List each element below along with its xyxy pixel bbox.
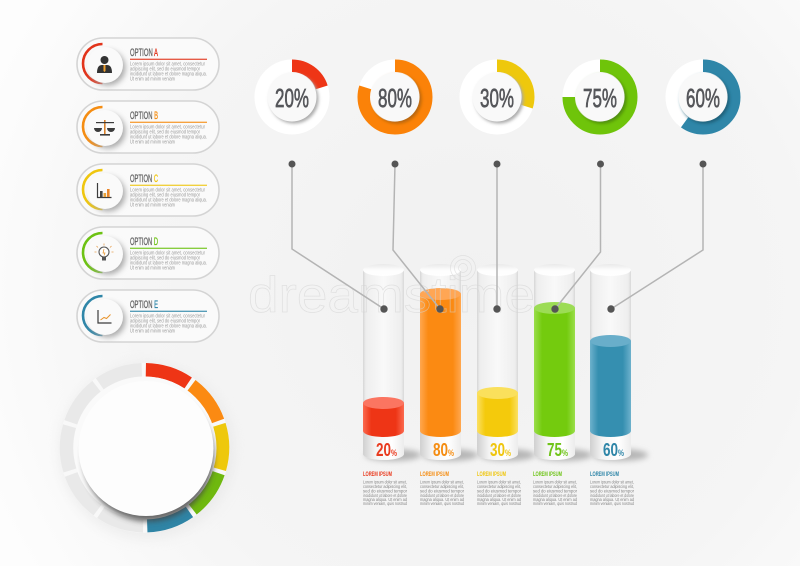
- watermark: dreamstime: [248, 267, 535, 323]
- caption: yellow column: incididunt ut labore et dolore: [477, 493, 521, 498]
- panel: option A: [77, 38, 219, 90]
- donut: 60%: [666, 60, 740, 134]
- caption: yellow column: minim veniam, quis nostrud: [477, 501, 521, 506]
- icon: light bulb: [94, 244, 114, 260]
- option E text: Ut enim ad minim veniam: [130, 328, 175, 334]
- tube: 60% blue: [590, 264, 648, 461]
- donut: 30%: 30%: [480, 83, 514, 113]
- caption: yellow column: magna aliqua. Ut enim ad: [477, 497, 521, 502]
- caption: blue column: minim veniam, quis nostrud: [590, 501, 634, 506]
- caption: red column: sed do eiusmod tempor: [363, 488, 407, 494]
- caption: orange column: magna aliqua. Ut enim ad: [420, 497, 464, 502]
- option E heading: OPTION E: [130, 299, 158, 311]
- donut: 80%: 80%: [378, 83, 412, 113]
- caption: blue column: LOREM IPSUM: [590, 471, 619, 478]
- caption: red column: [363, 471, 407, 506]
- option E text: Lorem ipsum dolor sit amet, consectetur: [130, 314, 205, 320]
- caption: green column: incididunt ut labore et dolore: [533, 493, 577, 498]
- caption: orange column: incididunt ut labore et dolore: [420, 493, 464, 498]
- donut: 30%: [460, 60, 534, 134]
- option A text: incididunt ut labore et dolore magna aliqua.: [130, 72, 207, 78]
- tube: 30% yellow: 30%: [490, 440, 511, 460]
- connector: 20%: [288, 160, 388, 313]
- caption: green column: magna aliqua. Ut enim ad: [533, 497, 577, 502]
- caption: red column: incididunt ut labore et dolore: [363, 493, 407, 498]
- option C text: incididunt ut labore et dolore magna aliqua.: [130, 198, 207, 204]
- tube: 60% blue: 60%: [603, 440, 624, 460]
- caption: orange column: LOREM IPSUM: [420, 471, 449, 478]
- icon: businessman: [97, 56, 112, 73]
- caption: blue column: incididunt ut labore et dolore: [590, 493, 634, 498]
- option C text: adipiscing elit, sed do eiusmod tempor: [130, 192, 200, 198]
- caption: green column: Lorem ipsum dolor sit amet,: [533, 480, 577, 484]
- option C text: Ut enim ad minim veniam: [130, 202, 175, 208]
- donut: 75%: 75%: [583, 83, 617, 113]
- caption: green column: minim veniam, quis nostrud: [533, 501, 577, 506]
- caption: green column: LOREM IPSUM: [533, 471, 562, 478]
- option D text: incididunt ut labore et dolore magna aliqua.: [130, 260, 207, 266]
- option B text: incididunt ut labore et dolore magna aliqua.: [130, 134, 207, 140]
- icon: bar chart: [98, 183, 112, 198]
- caption: blue column: Lorem ipsum dolor sit amet,: [590, 480, 634, 484]
- caption: orange column: Lorem ipsum dolor sit amet,: [420, 480, 464, 484]
- donut: 20%: 20%: [275, 83, 309, 113]
- option D text: [130, 250, 207, 272]
- option D text: adipiscing elit, sed do eiusmod tempor: [130, 256, 200, 262]
- connector: 80%: [392, 160, 444, 313]
- option B text: Lorem ipsum dolor sit amet, consectetur: [130, 124, 205, 130]
- tube: 20% red: 20%: [376, 440, 397, 460]
- big ring chart: [59, 363, 235, 539]
- caption: orange column: [420, 471, 464, 506]
- connector: 75%: [551, 160, 604, 313]
- caption: yellow column: Lorem ipsum dolor sit amet,: [477, 480, 521, 484]
- option A text: Ut enim ad minim veniam: [130, 76, 175, 82]
- option B text: [130, 124, 207, 146]
- panel: option D: [77, 227, 219, 279]
- option C text: [130, 188, 207, 208]
- caption: blue column: consectetur adipiscing elit,: [590, 484, 634, 489]
- caption: blue column: magna aliqua. Ut enim ad: [590, 497, 634, 502]
- option B text: adipiscing elit, sed do eiusmod tempor: [130, 130, 200, 136]
- option E text: adipiscing elit, sed do eiusmod tempor: [130, 318, 200, 324]
- tube: 80% orange: [420, 264, 478, 461]
- connector: 60%: [607, 160, 706, 313]
- panel: option C: [77, 164, 219, 216]
- caption: orange column: minim veniam, quis nostrud: [420, 501, 464, 506]
- icon: line chart: [98, 310, 112, 323]
- caption: green column: sed do eiusmod tempor: [533, 488, 577, 494]
- option A text: [130, 62, 207, 82]
- caption: red column: consectetur adipiscing elit,: [363, 484, 407, 489]
- donut: 20%: [254, 60, 330, 134]
- option A heading: OPTION A: [130, 47, 158, 59]
- caption: red column: magna aliqua. Ut enim ad: [363, 497, 407, 502]
- caption: orange column: sed do eiusmod tempor: [420, 488, 464, 494]
- option E text: [130, 314, 207, 334]
- caption: yellow column: [477, 471, 521, 506]
- tube: 20% red: [363, 264, 421, 461]
- tube: 80% orange: 80%: [433, 440, 454, 460]
- caption: red column: minim veniam, quis nostrud: [363, 501, 407, 506]
- caption: green column: [533, 471, 577, 506]
- option C heading: OPTION C: [130, 173, 158, 185]
- donut: 75%: [562, 60, 638, 134]
- option D heading: OPTION D: [130, 236, 158, 248]
- panel: option B: [77, 101, 219, 153]
- tube: 75% green: [534, 264, 592, 461]
- option C text: Lorem ipsum dolor sit amet, consectetur: [130, 188, 205, 194]
- caption: red column: Lorem ipsum dolor sit amet,: [363, 480, 407, 484]
- caption: yellow column: consectetur adipiscing elit,: [477, 484, 521, 489]
- option E text: incididunt ut labore et dolore magna aliqua.: [130, 324, 207, 330]
- option A text: adipiscing elit, sed do eiusmod tempor: [130, 66, 200, 72]
- donut: 60%: 60%: [686, 83, 720, 113]
- caption: orange column: consectetur adipiscing elit,: [420, 484, 464, 489]
- caption: red column: LOREM IPSUM: [363, 471, 392, 478]
- option D text: Lorem ipsum dolor sit amet, consectetur: [130, 250, 205, 256]
- panel: option E: [77, 290, 219, 342]
- caption: green column: consectetur adipiscing elit,: [533, 484, 577, 489]
- caption: yellow column: sed do eiusmod tempor: [477, 488, 521, 494]
- caption: yellow column: LOREM IPSUM: [477, 471, 506, 478]
- icon: scales: [94, 120, 115, 136]
- caption: blue column: sed do eiusmod tempor: [590, 488, 634, 494]
- option A text: Lorem ipsum dolor sit amet, consectetur: [130, 62, 205, 68]
- option D text: Ut enim ad minim veniam: [130, 266, 175, 272]
- connector: 30%: [493, 160, 501, 313]
- option B heading: OPTION B: [130, 110, 158, 122]
- tube: 30% yellow: [477, 264, 535, 461]
- option B text: Ut enim ad minim veniam: [130, 140, 175, 146]
- donut: 80%: [358, 60, 432, 134]
- tube: 75% green: 75%: [547, 440, 568, 460]
- caption: blue column: [590, 471, 634, 506]
